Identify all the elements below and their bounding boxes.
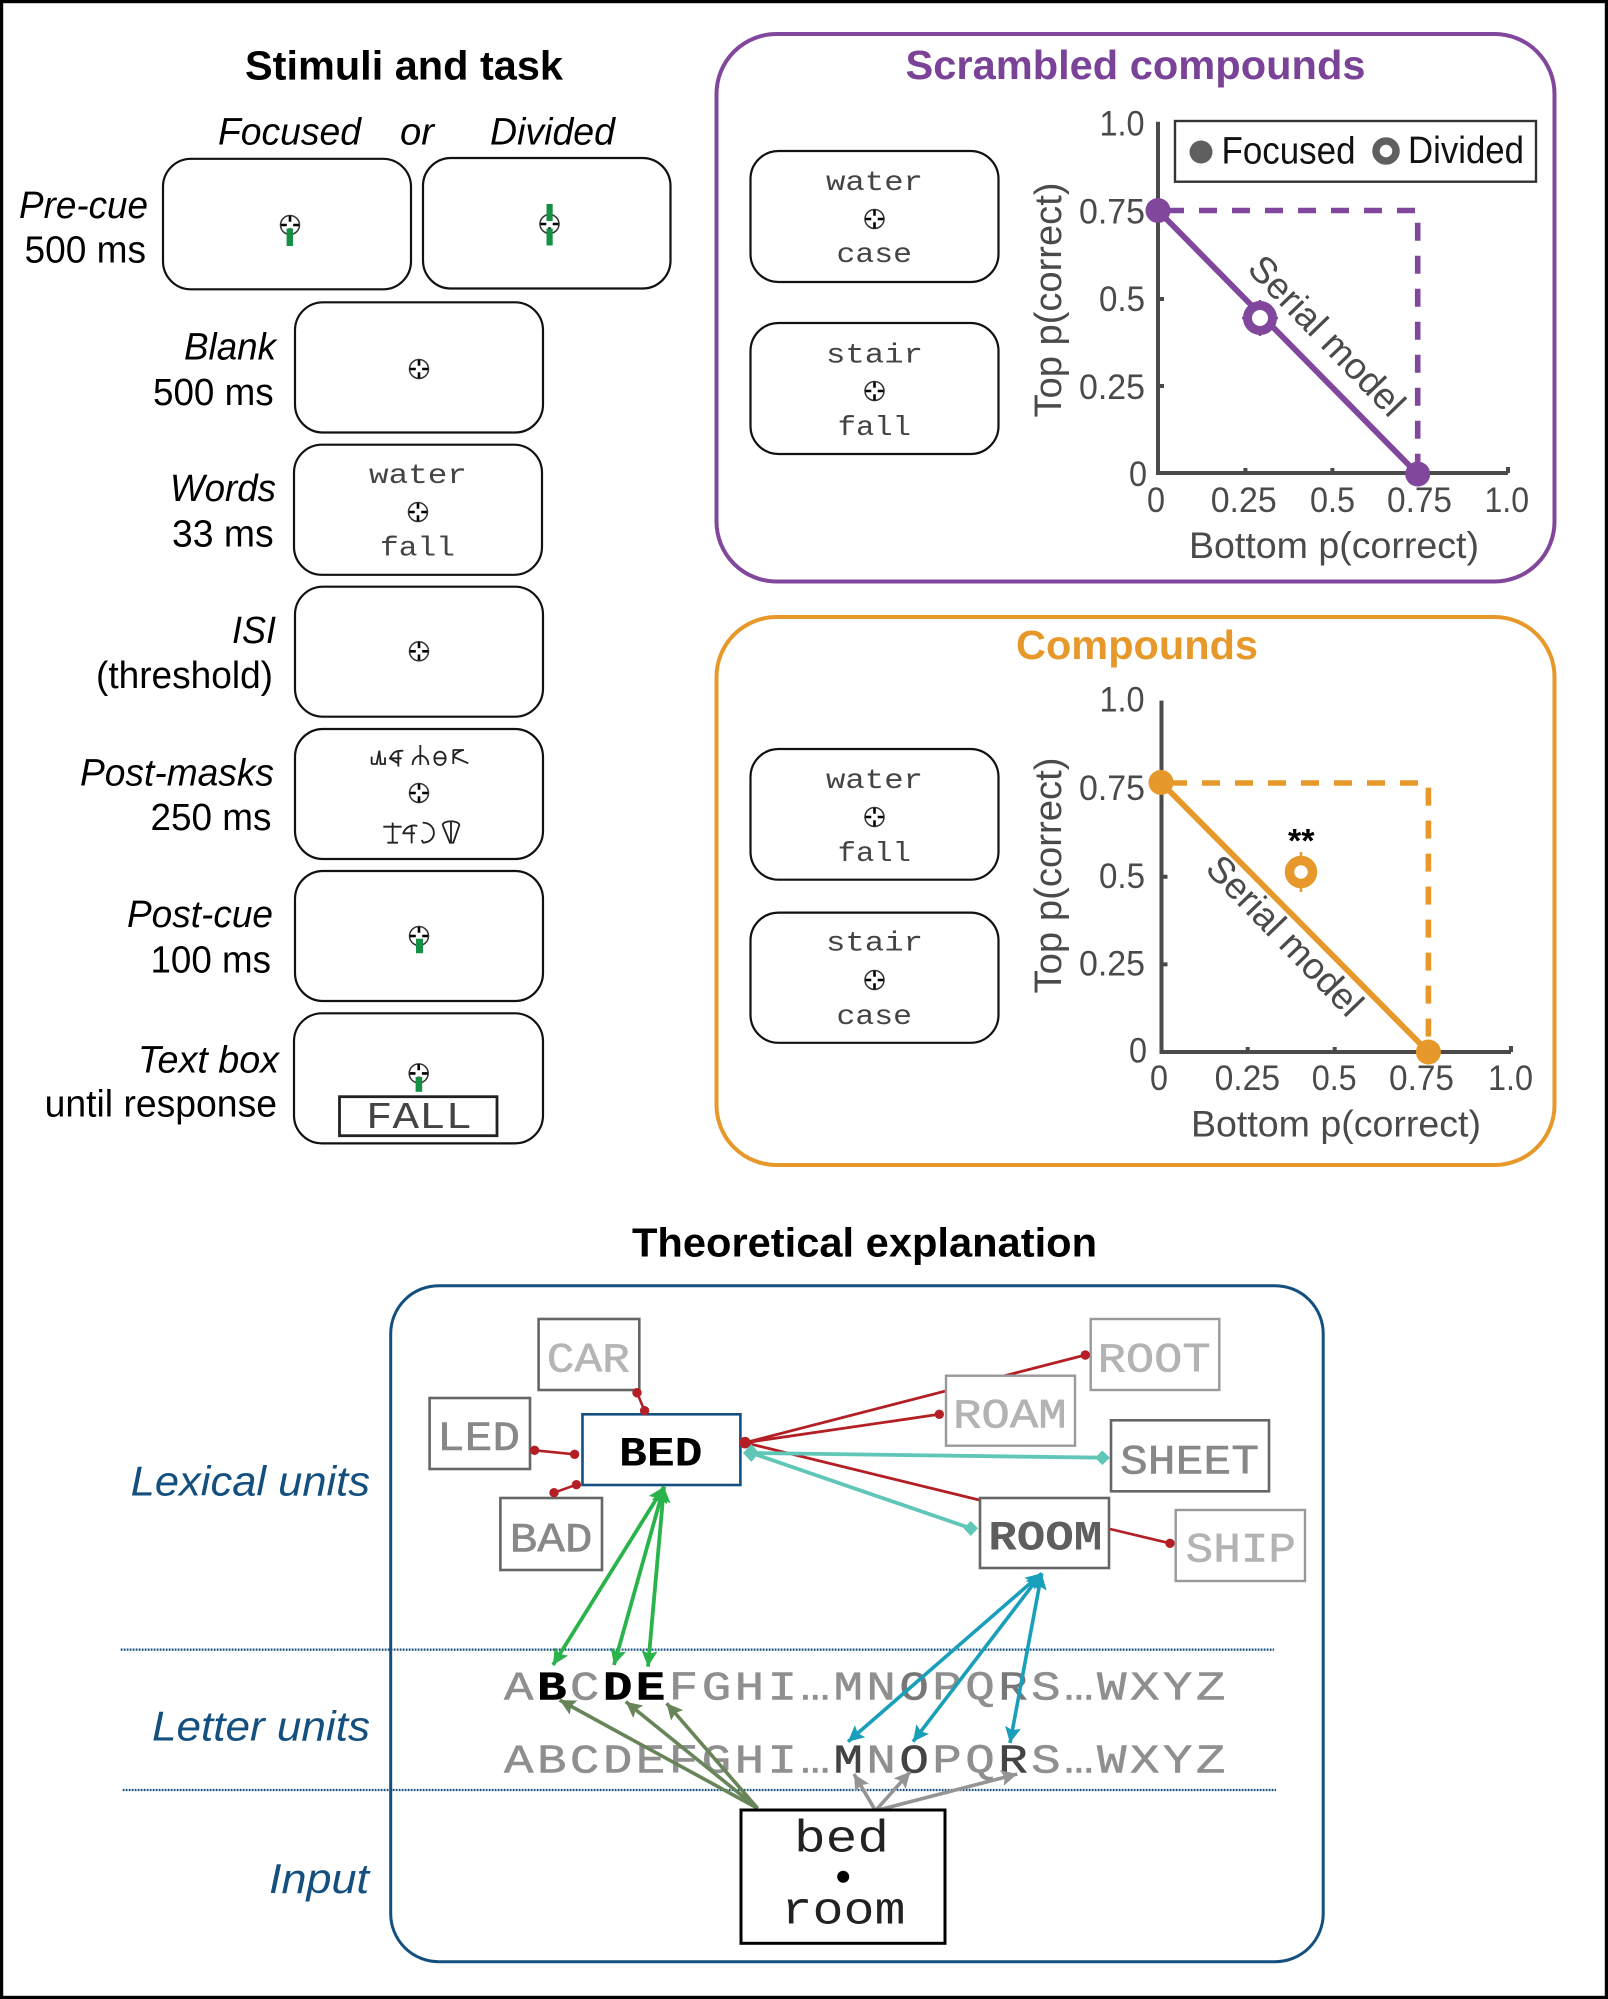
label: text box until response: [45, 1040, 281, 1126]
word unit: LED: LED: [437, 1415, 520, 1463]
label: pre-cue 500 ms: Pre-cue: [19, 185, 148, 227]
screen: stair case: [750, 913, 998, 1043]
label: blank 500 ms: [153, 327, 278, 414]
serial model line: [1158, 210, 1418, 474]
label: or: or: [400, 112, 435, 154]
excitatory semantic connections: [751, 1453, 1102, 1528]
screen: stair fall: stair: [826, 341, 923, 372]
screen: blank: [295, 302, 543, 432]
screen: post-masks: [295, 729, 543, 859]
y tick labels: 0.25: [1079, 944, 1145, 984]
word unit: BED: [582, 1414, 740, 1485]
y tick labels: 0.5: [1099, 857, 1145, 896]
screen: water case: [750, 151, 998, 282]
label: text box until response: until response: [45, 1084, 277, 1126]
y axis title: Top p(correct): [1028, 758, 1070, 994]
screen: stair fall: [750, 323, 998, 454]
label: letter units: Letter units: [152, 1703, 370, 1750]
panel: scrambled compounds: [716, 34, 1554, 582]
label: lexical units: Lexical units: [131, 1458, 370, 1505]
significance stars: **: [1288, 822, 1315, 859]
screen: divided pre-cue: [423, 158, 670, 288]
label: divided: Divided: [490, 112, 617, 154]
serial model label: Serial model: [1240, 247, 1414, 424]
label: post-masks 250 ms: 250 ms: [150, 797, 272, 839]
label: focused: Focused: [218, 112, 363, 154]
label: ISI threshold: [96, 610, 276, 697]
input box: room: [782, 1886, 906, 1937]
separators: [121, 1650, 1276, 1790]
serial model label: Serial model: [1198, 847, 1372, 1024]
screen: stair fall: fall: [838, 413, 911, 444]
x tick labels: 0.75: [1389, 1059, 1454, 1098]
word unit: BED: BED: [619, 1431, 702, 1479]
word unit: BAD: [500, 1498, 602, 1570]
panel: theoretical explanation: [121, 1286, 1323, 1962]
label: input: Input: [269, 1855, 371, 1902]
panel: stimuli and task: [19, 43, 670, 1143]
y tick labels: 0.75: [1079, 769, 1145, 808]
label: post-cue 100 ms: [127, 894, 273, 981]
word unit: ROOM: [980, 1498, 1109, 1568]
screen: focused pre-cue: [163, 159, 411, 289]
screen: post-cue: [295, 871, 543, 1001]
y tick labels: 1.0: [1100, 681, 1144, 720]
x tick labels: 1.0: [1488, 1059, 1533, 1098]
inhibitory connections from BED: [745, 1355, 1085, 1500]
label: post-cue 100 ms: Post-cue: [127, 894, 273, 936]
letter units top row: ABCDEFGHI…MNOPQRS…WXYZ: [504, 1665, 1229, 1712]
screen: ISI: [295, 587, 543, 717]
legend: Divided: [1408, 130, 1524, 172]
heading: stimuli and task: Stimuli and task: [245, 43, 563, 89]
x tick labels: 0.5: [1312, 1059, 1357, 1098]
x tick labels: [1150, 1059, 1533, 1098]
arrows: BED to letters: [553, 1487, 664, 1667]
label: post-masks 250 ms: [80, 753, 274, 839]
y tick labels: [1079, 104, 1147, 494]
screen: words: fall: [380, 534, 455, 565]
screen: water case: water: [826, 168, 923, 199]
step: pre-cue: [19, 158, 670, 289]
screen: stair case: stair: [826, 929, 923, 960]
legend: [1175, 121, 1536, 182]
heading: compounds: Compounds: [1016, 622, 1258, 668]
label: words 33 ms: Words: [170, 468, 276, 510]
inhibitory end points: [531, 1352, 1173, 1547]
label: pre-cue 500 ms: 500 ms: [24, 230, 146, 272]
y tick labels: 0.75: [1079, 192, 1145, 232]
label: text box until response: Text box: [138, 1040, 281, 1082]
step: post-masks: [80, 729, 543, 859]
x tick labels: 0.5: [1310, 481, 1355, 520]
x tick labels: 1.0: [1484, 481, 1529, 520]
label: ISI threshold: ISI: [232, 610, 276, 652]
letter units bottom row: ABCDEFGHI…MNOPQRS…WXYZ: [504, 1738, 1229, 1785]
screen: water fall: water: [826, 766, 923, 797]
label: blank 500 ms: Blank: [184, 327, 278, 369]
label: pre-cue 500 ms: [19, 185, 148, 272]
x tick labels: 0: [1150, 1059, 1168, 1098]
label: words 33 ms: [170, 468, 276, 556]
y axis title: Top p(correct): [1028, 183, 1070, 418]
x tick labels: 0: [1147, 481, 1165, 520]
word unit: ROOM: ROOM: [988, 1514, 1102, 1562]
excitatory end points: [743, 1444, 1110, 1536]
dashed parallel model: [1161, 783, 1428, 1052]
label: post-masks 250 ms: Post-masks: [80, 753, 274, 795]
focused points: [1148, 770, 1441, 1064]
word unit: ROOT: ROOT: [1098, 1337, 1211, 1385]
axes: [1158, 122, 1508, 473]
input box: [741, 1810, 945, 1943]
screen: water fall: fall: [838, 839, 911, 870]
x axis title: Bottom p(correct): [1189, 525, 1479, 566]
y tick labels: [1079, 681, 1147, 1070]
label: blank 500 ms: 500 ms: [153, 372, 274, 414]
label: ISI threshold: (threshold): [96, 655, 273, 697]
heading: theoretical explanation: Theoretical explanation: [632, 1220, 1097, 1266]
y tick labels: 1.0: [1100, 104, 1144, 143]
screen: text box: FALL: [366, 1097, 472, 1140]
word unit: SHEET: [1111, 1420, 1269, 1491]
word unit: ROOT: [1091, 1319, 1219, 1390]
y tick labels: 0.5: [1099, 280, 1145, 319]
step: ISI: [96, 587, 543, 717]
screen: water fall: [750, 749, 998, 880]
arrows: input room to letters: [854, 1772, 1017, 1811]
arrows: input bed to letters: [560, 1700, 758, 1808]
input box: bed: [794, 1815, 889, 1866]
word unit: CAR: CAR: [547, 1337, 630, 1385]
word unit: SHIP: [1176, 1510, 1305, 1581]
serial model line: [1161, 782, 1428, 1052]
x tick labels: 0.75: [1387, 481, 1452, 520]
screen: stair case: case: [836, 1002, 912, 1033]
y tick labels: 0: [1129, 1032, 1147, 1070]
word unit: LED: [430, 1398, 530, 1469]
screen: words: [294, 445, 542, 575]
chart: compounds attention operating characteristic: [1028, 681, 1533, 1144]
x tick labels: [1147, 481, 1529, 520]
word unit: SHEET: SHEET: [1120, 1438, 1259, 1486]
word unit: ROAM: ROAM: [953, 1393, 1067, 1441]
label: post-cue 100 ms: 100 ms: [150, 939, 271, 981]
step: words: [170, 445, 542, 575]
word unit: ROAM: [946, 1376, 1075, 1446]
word unit: BAD: BAD: [510, 1517, 593, 1565]
x tick labels: 0.25: [1215, 1059, 1280, 1098]
x axis title: Bottom p(correct): [1191, 1104, 1481, 1144]
x tick labels: 0.25: [1211, 481, 1277, 520]
screen: words: water: [369, 461, 467, 492]
screen: text box: [294, 1013, 543, 1143]
divided point: [1242, 300, 1278, 336]
step: blank: [153, 302, 543, 432]
axes: [1162, 701, 1511, 1052]
divided point: [1290, 852, 1312, 892]
panel: compounds: [716, 617, 1554, 1165]
screen: water case: case: [836, 240, 912, 271]
arrows: ROOM to letters: [848, 1573, 1042, 1743]
dashed parallel model: [1158, 210, 1418, 474]
word unit: CAR: [539, 1319, 639, 1390]
word unit: SHIP: SHIP: [1186, 1527, 1296, 1575]
heading: scrambled compounds: Scrambled compounds: [906, 42, 1366, 88]
y tick labels: 0.25: [1079, 368, 1145, 407]
step: post-cue: [127, 871, 543, 1001]
label: words 33 ms: 33 ms: [172, 514, 274, 556]
focused points: [1146, 198, 1430, 486]
chart: scrambled attention operating characteristic: [1028, 104, 1536, 566]
y tick labels: 0: [1129, 455, 1147, 494]
level labels: [131, 1458, 371, 1902]
legend: Focused: [1222, 130, 1356, 172]
step: text box: [45, 1013, 543, 1143]
